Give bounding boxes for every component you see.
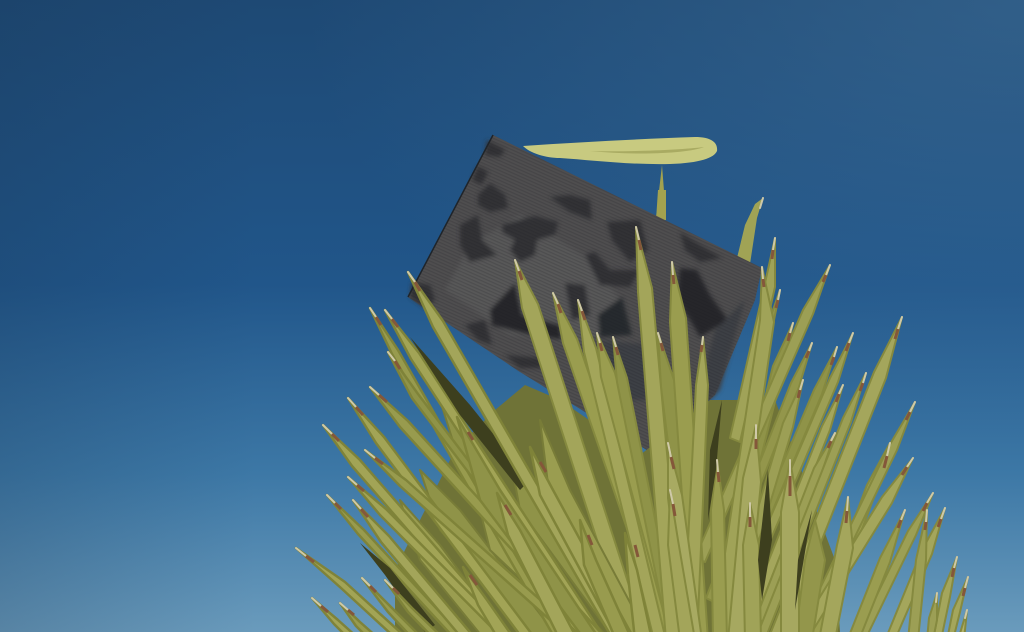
plant leaves behind the pouch: [656, 165, 763, 264]
plant interior mass: [395, 385, 840, 632]
brown leaf bands: [306, 240, 965, 615]
dark gaps between right leaves: [708, 400, 812, 610]
camouflage pattern: [410, 140, 745, 420]
leaves: centre right: [711, 238, 799, 632]
pale leaf tips: [296, 198, 968, 618]
strap loop: [523, 137, 717, 164]
leaves: left side: [296, 272, 652, 632]
leaves: centre: [515, 227, 708, 632]
leaves: left filler mass: [400, 400, 650, 632]
pouch: [408, 135, 762, 452]
leaves: right side: [695, 265, 968, 632]
